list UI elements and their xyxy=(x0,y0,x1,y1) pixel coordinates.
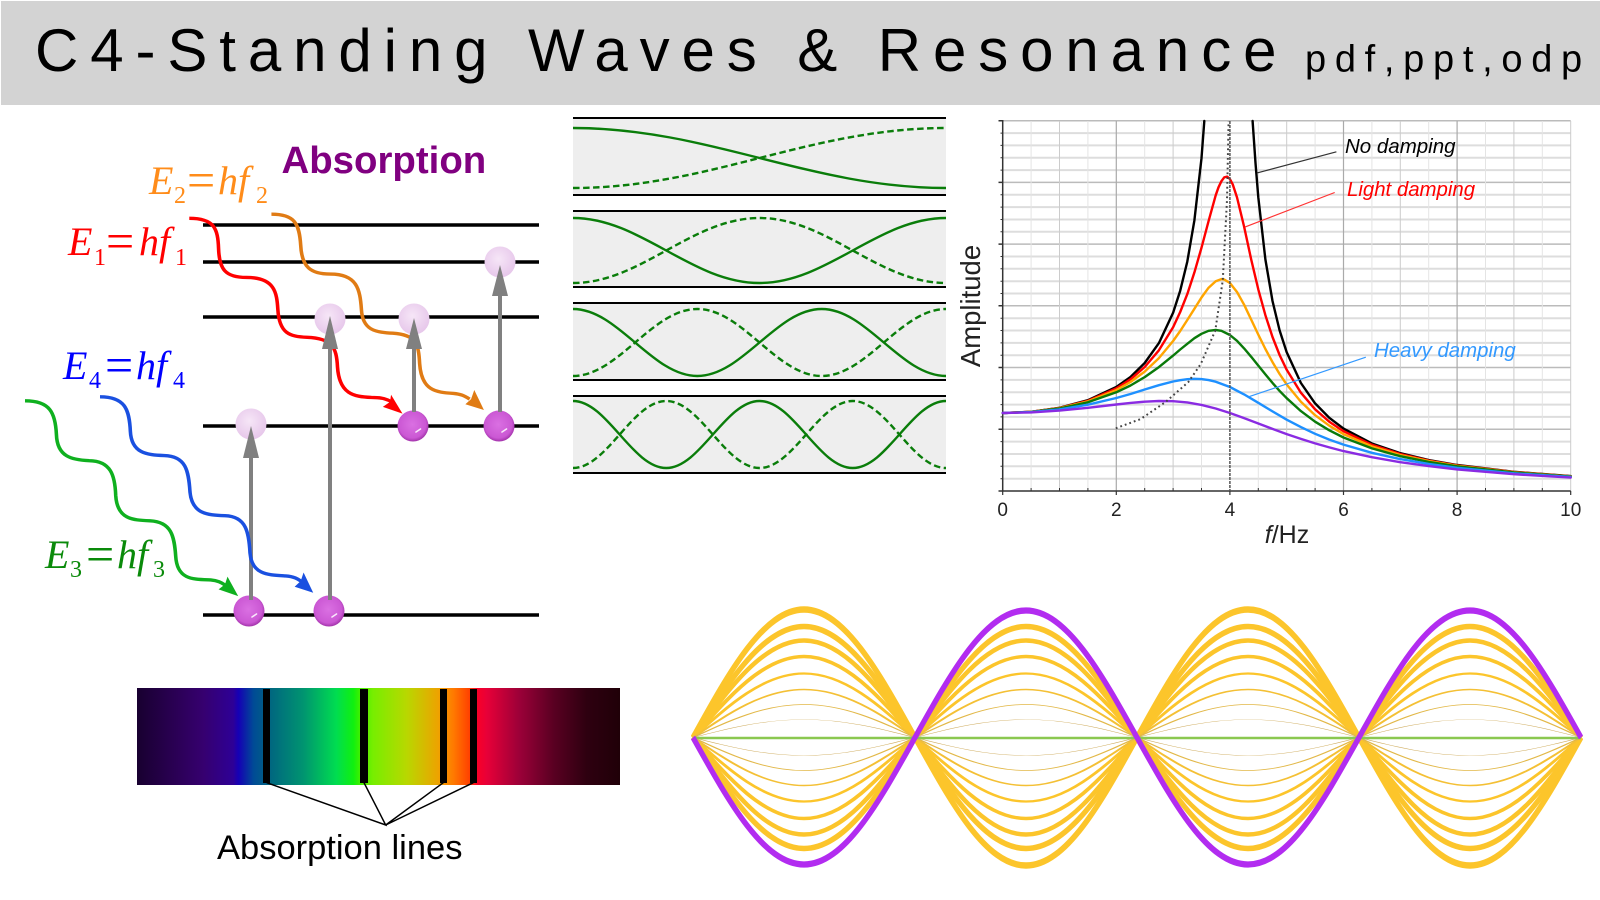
formula: E3: E xyxy=(44,532,69,577)
x axis tick labels: 0 xyxy=(997,500,1008,521)
atoms: excited states xyxy=(236,246,516,440)
formula: E2: = xyxy=(187,152,215,208)
formula: E4: = xyxy=(105,337,133,393)
formula: E3: = xyxy=(86,526,114,582)
curve: blue heavy damping xyxy=(1003,379,1571,477)
x axis tick labels: 2 xyxy=(1111,500,1122,521)
curve: light damping xyxy=(1003,177,1571,476)
mode 4 xyxy=(573,396,946,473)
title banner xyxy=(1,1,1600,105)
curve: purple heaviest damping xyxy=(1003,401,1571,478)
absorption lines xyxy=(263,689,477,783)
panel: standing wave modes xyxy=(573,118,946,473)
formula: E1: 1 xyxy=(94,245,106,271)
x axis tick labels: 8 xyxy=(1452,500,1462,521)
energy levels xyxy=(203,225,539,615)
x axis title: f/Hz xyxy=(1265,521,1309,549)
formula: E4: E xyxy=(62,343,87,388)
panel: absorption spectrum xyxy=(137,688,620,867)
x axis tick labels: 6 xyxy=(1338,500,1349,521)
formula: E2: hf xyxy=(218,158,254,203)
formula: E2: 2 xyxy=(174,183,186,209)
panel: standing wave envelope xyxy=(693,610,1581,866)
x axis tick labels: 4 xyxy=(1225,500,1236,521)
formula: E4: hf xyxy=(136,343,172,388)
purple maximum displacement xyxy=(693,610,1581,864)
curve: orange damping xyxy=(1003,279,1571,476)
leader lines xyxy=(267,783,473,825)
yellow oscillation positions xyxy=(693,610,1581,866)
label: no damping: No damping xyxy=(1345,135,1456,158)
formula: E3: 3 xyxy=(153,557,165,583)
panel: absorption energy level diagram xyxy=(25,139,539,626)
resonant frequency line xyxy=(1229,121,1231,491)
x axis tick labels: 10 xyxy=(1560,500,1581,521)
formula: E3: hf xyxy=(117,532,153,577)
curve: green damping xyxy=(1003,330,1571,477)
atoms: ground states xyxy=(234,410,514,626)
formula: E2: 2 xyxy=(256,183,268,209)
formula: E1: E xyxy=(67,219,92,264)
formula: E1: 1 xyxy=(175,245,187,271)
title: C4-Standing Waves & Resonance xyxy=(35,17,1288,84)
label: heavy damping: Heavy damping xyxy=(1374,340,1516,362)
photon: orange wave xyxy=(271,214,484,410)
photon: red wave xyxy=(189,218,402,414)
leader lines xyxy=(1245,152,1366,397)
curve: no damping xyxy=(1003,121,1571,476)
y axis title: Amplitude xyxy=(955,245,986,367)
label: absorption lines: Absorption lines xyxy=(217,829,462,867)
x axis tick labels xyxy=(997,500,1581,521)
transition arrows xyxy=(243,265,508,600)
green rest line xyxy=(693,737,1581,739)
formula: E2: E xyxy=(148,158,173,203)
mode 1 xyxy=(573,118,946,195)
formula: E1: hf xyxy=(139,219,175,264)
formula: E3: 3 xyxy=(70,557,82,583)
label: light damping: Light damping xyxy=(1347,179,1476,201)
dotted peak locus xyxy=(1116,121,1229,428)
axes and ticks xyxy=(998,120,1571,495)
heading: Absorption: Absorption xyxy=(282,139,486,182)
formula: E4: 4 xyxy=(89,368,101,394)
spectrum bar xyxy=(137,688,620,785)
mode 2 xyxy=(573,211,946,287)
formula: E1: = xyxy=(106,213,134,269)
photon: green wave xyxy=(25,401,238,596)
formula: E4: 4 xyxy=(173,368,185,394)
chart: resonance curves xyxy=(955,120,1581,549)
mode 3 xyxy=(573,303,946,380)
photon: blue wave xyxy=(100,397,313,593)
subtitle: file formats: pdf,ppt,odp xyxy=(1305,38,1591,80)
